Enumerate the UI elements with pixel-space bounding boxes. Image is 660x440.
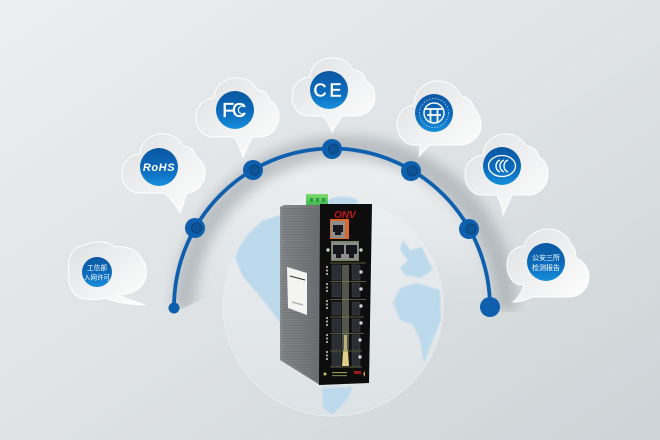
centre strip	[342, 265, 349, 350]
front panel	[319, 204, 372, 385]
continent: africa	[393, 283, 441, 363]
cloud: police lab	[507, 229, 589, 302]
badge: MIIT	[82, 257, 112, 287]
cloud: RoHS	[122, 134, 205, 213]
badge: police lab	[527, 243, 565, 281]
side housing	[280, 205, 320, 385]
bottom strip	[324, 371, 365, 377]
console port	[330, 219, 349, 239]
continent: europe	[400, 240, 433, 278]
badge: MIIT: 工信部	[87, 263, 107, 272]
node: CE	[322, 139, 342, 159]
device: industrial switch	[280, 194, 372, 385]
badge: NAL	[415, 94, 453, 132]
node: NAL	[401, 161, 421, 181]
cloud: FC	[196, 78, 279, 157]
green terminal block	[306, 194, 328, 205]
cloud: CCC	[465, 134, 548, 215]
node: end	[480, 297, 500, 317]
badge: police lab: 检测报告	[532, 263, 560, 272]
badge: RoHS: RoHS	[143, 162, 175, 174]
badge: FC: FC	[222, 100, 246, 122]
status LEDs	[326, 248, 363, 359]
badge: CCC	[483, 147, 521, 185]
continent: south america	[322, 387, 353, 415]
node: RoHS	[185, 218, 205, 238]
node: CCC	[459, 219, 479, 239]
cloud: NAL	[397, 81, 481, 156]
node: FC	[243, 160, 263, 180]
globe	[223, 196, 443, 416]
brand logo: ONV	[334, 210, 357, 221]
port legend	[326, 266, 328, 365]
node: start	[168, 302, 180, 314]
continent: arctic	[328, 196, 360, 205]
cloud: MIIT	[69, 242, 146, 305]
cloud: CE	[292, 58, 375, 132]
badge: MIIT: 入网许可	[84, 272, 110, 282]
badge: CE: CE	[313, 80, 345, 100]
light dome under arc	[174, 149, 490, 308]
RJ45 ports	[331, 241, 359, 261]
arc shadow	[184, 147, 506, 310]
arc timeline	[168, 139, 500, 317]
SFP ports	[332, 265, 360, 367]
row dividers	[330, 263, 366, 367]
badge: police lab: 公安三所	[532, 253, 560, 262]
continent: north america	[235, 214, 282, 325]
side label	[287, 267, 307, 315]
